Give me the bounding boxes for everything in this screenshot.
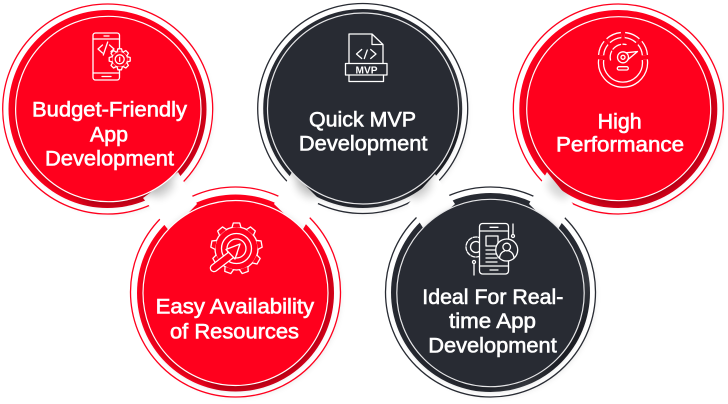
panel: high performance [527,17,711,204]
heading: real-time [422,286,563,357]
panel: real-time [397,199,584,390]
heading: budget-friendly: Budget-Friendly [32,98,188,122]
icon: speedometer [601,35,645,85]
heading: real-time: Ideal For Real- [422,286,563,309]
heading: quick mvp: Quick MVP [309,109,416,132]
heading: high performance: Performance [556,134,684,157]
heading: high performance [556,110,684,157]
outer rings: quick mvp [258,4,468,214]
icon: phone with user profile [466,224,518,275]
outer rings: budget-friendly [3,4,213,214]
icon: phone with gear [93,33,130,80]
icon: mvp document [346,34,387,82]
heading: easy availability: of Resources [170,320,299,343]
panel: easy availability [143,200,328,388]
panel: quick mvp [268,13,458,206]
heading: easy availability [156,295,315,343]
outer rings: easy availability [130,187,340,397]
heading: budget-friendly [32,98,188,170]
heading: budget-friendly: App [90,124,128,146]
outer rings: real-time [386,187,596,397]
heading: high performance: High [598,110,642,133]
heading: budget-friendly: Development [45,148,174,170]
panel: budget-friendly [16,16,201,204]
white connectors between circles [143,172,573,232]
heading: quick mvp: Development [299,133,428,156]
icon: gear with target and pencil [211,223,262,274]
heading: easy availability: Easy Availability [156,295,315,318]
outer rings: high performance [513,4,723,214]
heading: real-time: Development [428,334,557,357]
heading: quick mvp [299,109,428,156]
icon: mvp document: MVP [356,65,378,76]
heading: real-time: time App [449,310,536,333]
